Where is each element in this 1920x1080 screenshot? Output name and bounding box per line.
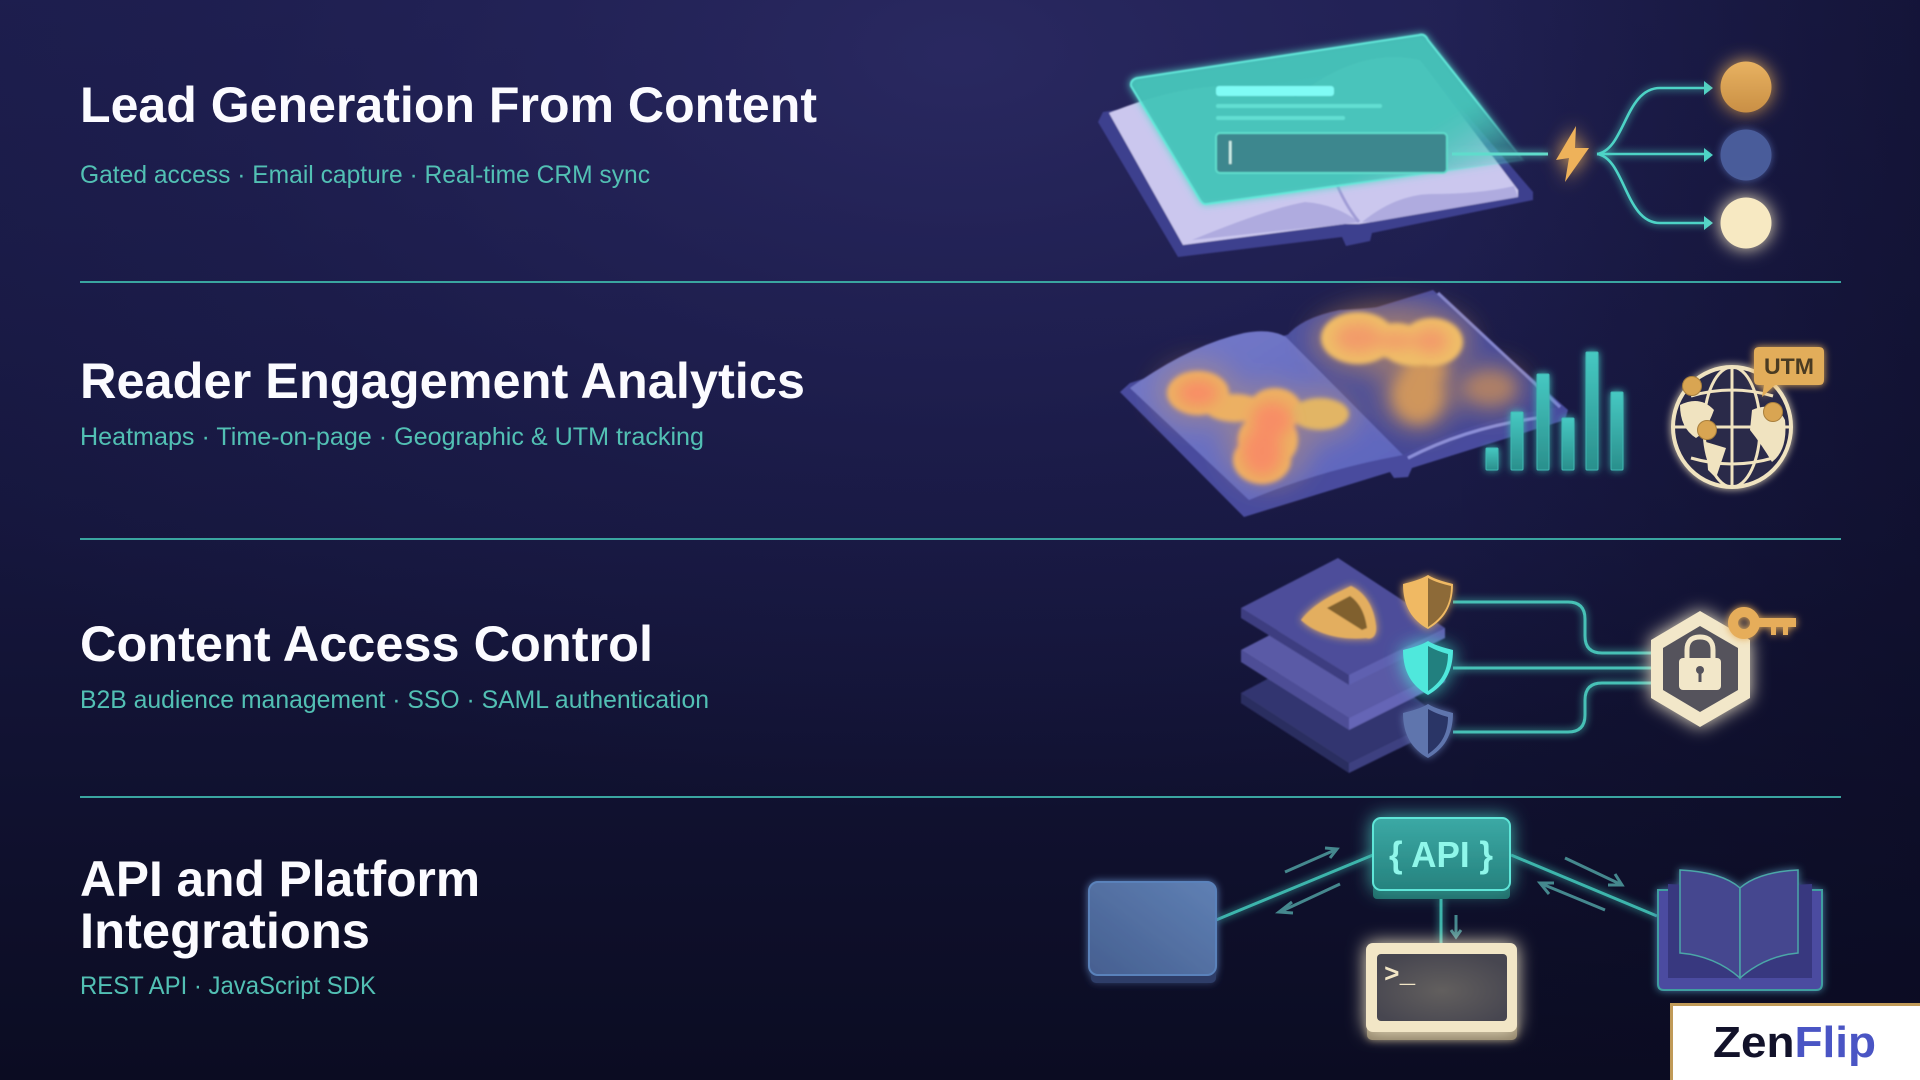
heading: API integrations: [80, 851, 480, 959]
heat blob: left page: [1156, 361, 1358, 487]
heading: lead generation: Lead Generation From Content: [80, 77, 817, 133]
ZenFlip logo: [1672, 1004, 1920, 1080]
book node: [1658, 870, 1822, 990]
subtext: API integrations: REST API · JavaScript SDK: [80, 972, 376, 1000]
tablet node: [1089, 882, 1216, 983]
branching arrows: [1597, 88, 1708, 223]
row: API integrations: [80, 818, 1920, 1080]
map pins: [1682, 376, 1782, 440]
arrow heads: [1704, 81, 1713, 230]
heat blob: right page: [1312, 304, 1524, 431]
lead dot: blue: [1720, 130, 1772, 180]
illustration: heatmap book: [1120, 290, 1568, 517]
UTM badge: UTM: [1764, 354, 1814, 379]
heading: access control: Content Access Control: [80, 616, 653, 672]
UTM badge: [1754, 347, 1824, 397]
top layer: [1241, 558, 1445, 685]
book pages: [1109, 57, 1518, 245]
page edge waves: [1192, 186, 1518, 240]
row: reader analytics: [80, 290, 1824, 517]
form text lines: [1216, 104, 1382, 120]
icon: lightning bolt: [1556, 126, 1589, 182]
middle layer: [1241, 598, 1445, 730]
input cursor: [1229, 141, 1232, 164]
left page: [1130, 331, 1403, 500]
connector lines: [1453, 602, 1651, 732]
email input field: [1216, 133, 1447, 173]
heading: API integrations: Integrations: [80, 903, 370, 959]
book cover: [1098, 60, 1533, 257]
shield: teal: [1403, 641, 1453, 695]
API box: [1373, 818, 1510, 899]
bar chart: [1486, 352, 1623, 470]
right page: [1286, 293, 1560, 455]
flow arrows: [1279, 848, 1622, 937]
ZenFlip logo: ZenFlip: [1713, 1018, 1876, 1067]
lead dot: cream: [1720, 198, 1772, 248]
heading: reader analytics: Reader Engagement Analytics: [80, 353, 805, 409]
API box: { API }: [1389, 834, 1493, 875]
lead dot: gold: [1720, 62, 1772, 112]
book cover: [1120, 290, 1568, 517]
icon: key: [1728, 607, 1796, 639]
heading: API integrations: API and Platform: [80, 851, 480, 907]
icon: globe: [1673, 367, 1791, 487]
icon: hexagon lock: [1651, 611, 1750, 727]
subtext: access control: B2B audience management · SSO · SAML authentication: [80, 686, 709, 714]
terminal node: [1366, 943, 1517, 1040]
row: lead generation: [80, 35, 1772, 257]
glass form panel: [1131, 35, 1523, 204]
shield: gold: [1403, 575, 1453, 629]
connector to bolt: [1452, 152, 1548, 156]
shield: blue: [1403, 704, 1453, 758]
form title bar: [1216, 86, 1334, 96]
connector lines: [1216, 855, 1657, 943]
subtext: reader analytics: Heatmaps · Time-on-page · Geographic & UTM tracking: [80, 423, 704, 451]
row: access control: [80, 558, 1796, 773]
subtext: lead generation: Gated access · Email capture · Real-time CRM sync: [80, 161, 650, 189]
illustration: stacked layers: [1241, 558, 1445, 773]
terminal node: >_: [1384, 960, 1416, 990]
bottom layer: [1241, 640, 1441, 773]
illustration: book with gated form: [1098, 35, 1533, 257]
icon: shield on top layer: [1301, 586, 1376, 638]
